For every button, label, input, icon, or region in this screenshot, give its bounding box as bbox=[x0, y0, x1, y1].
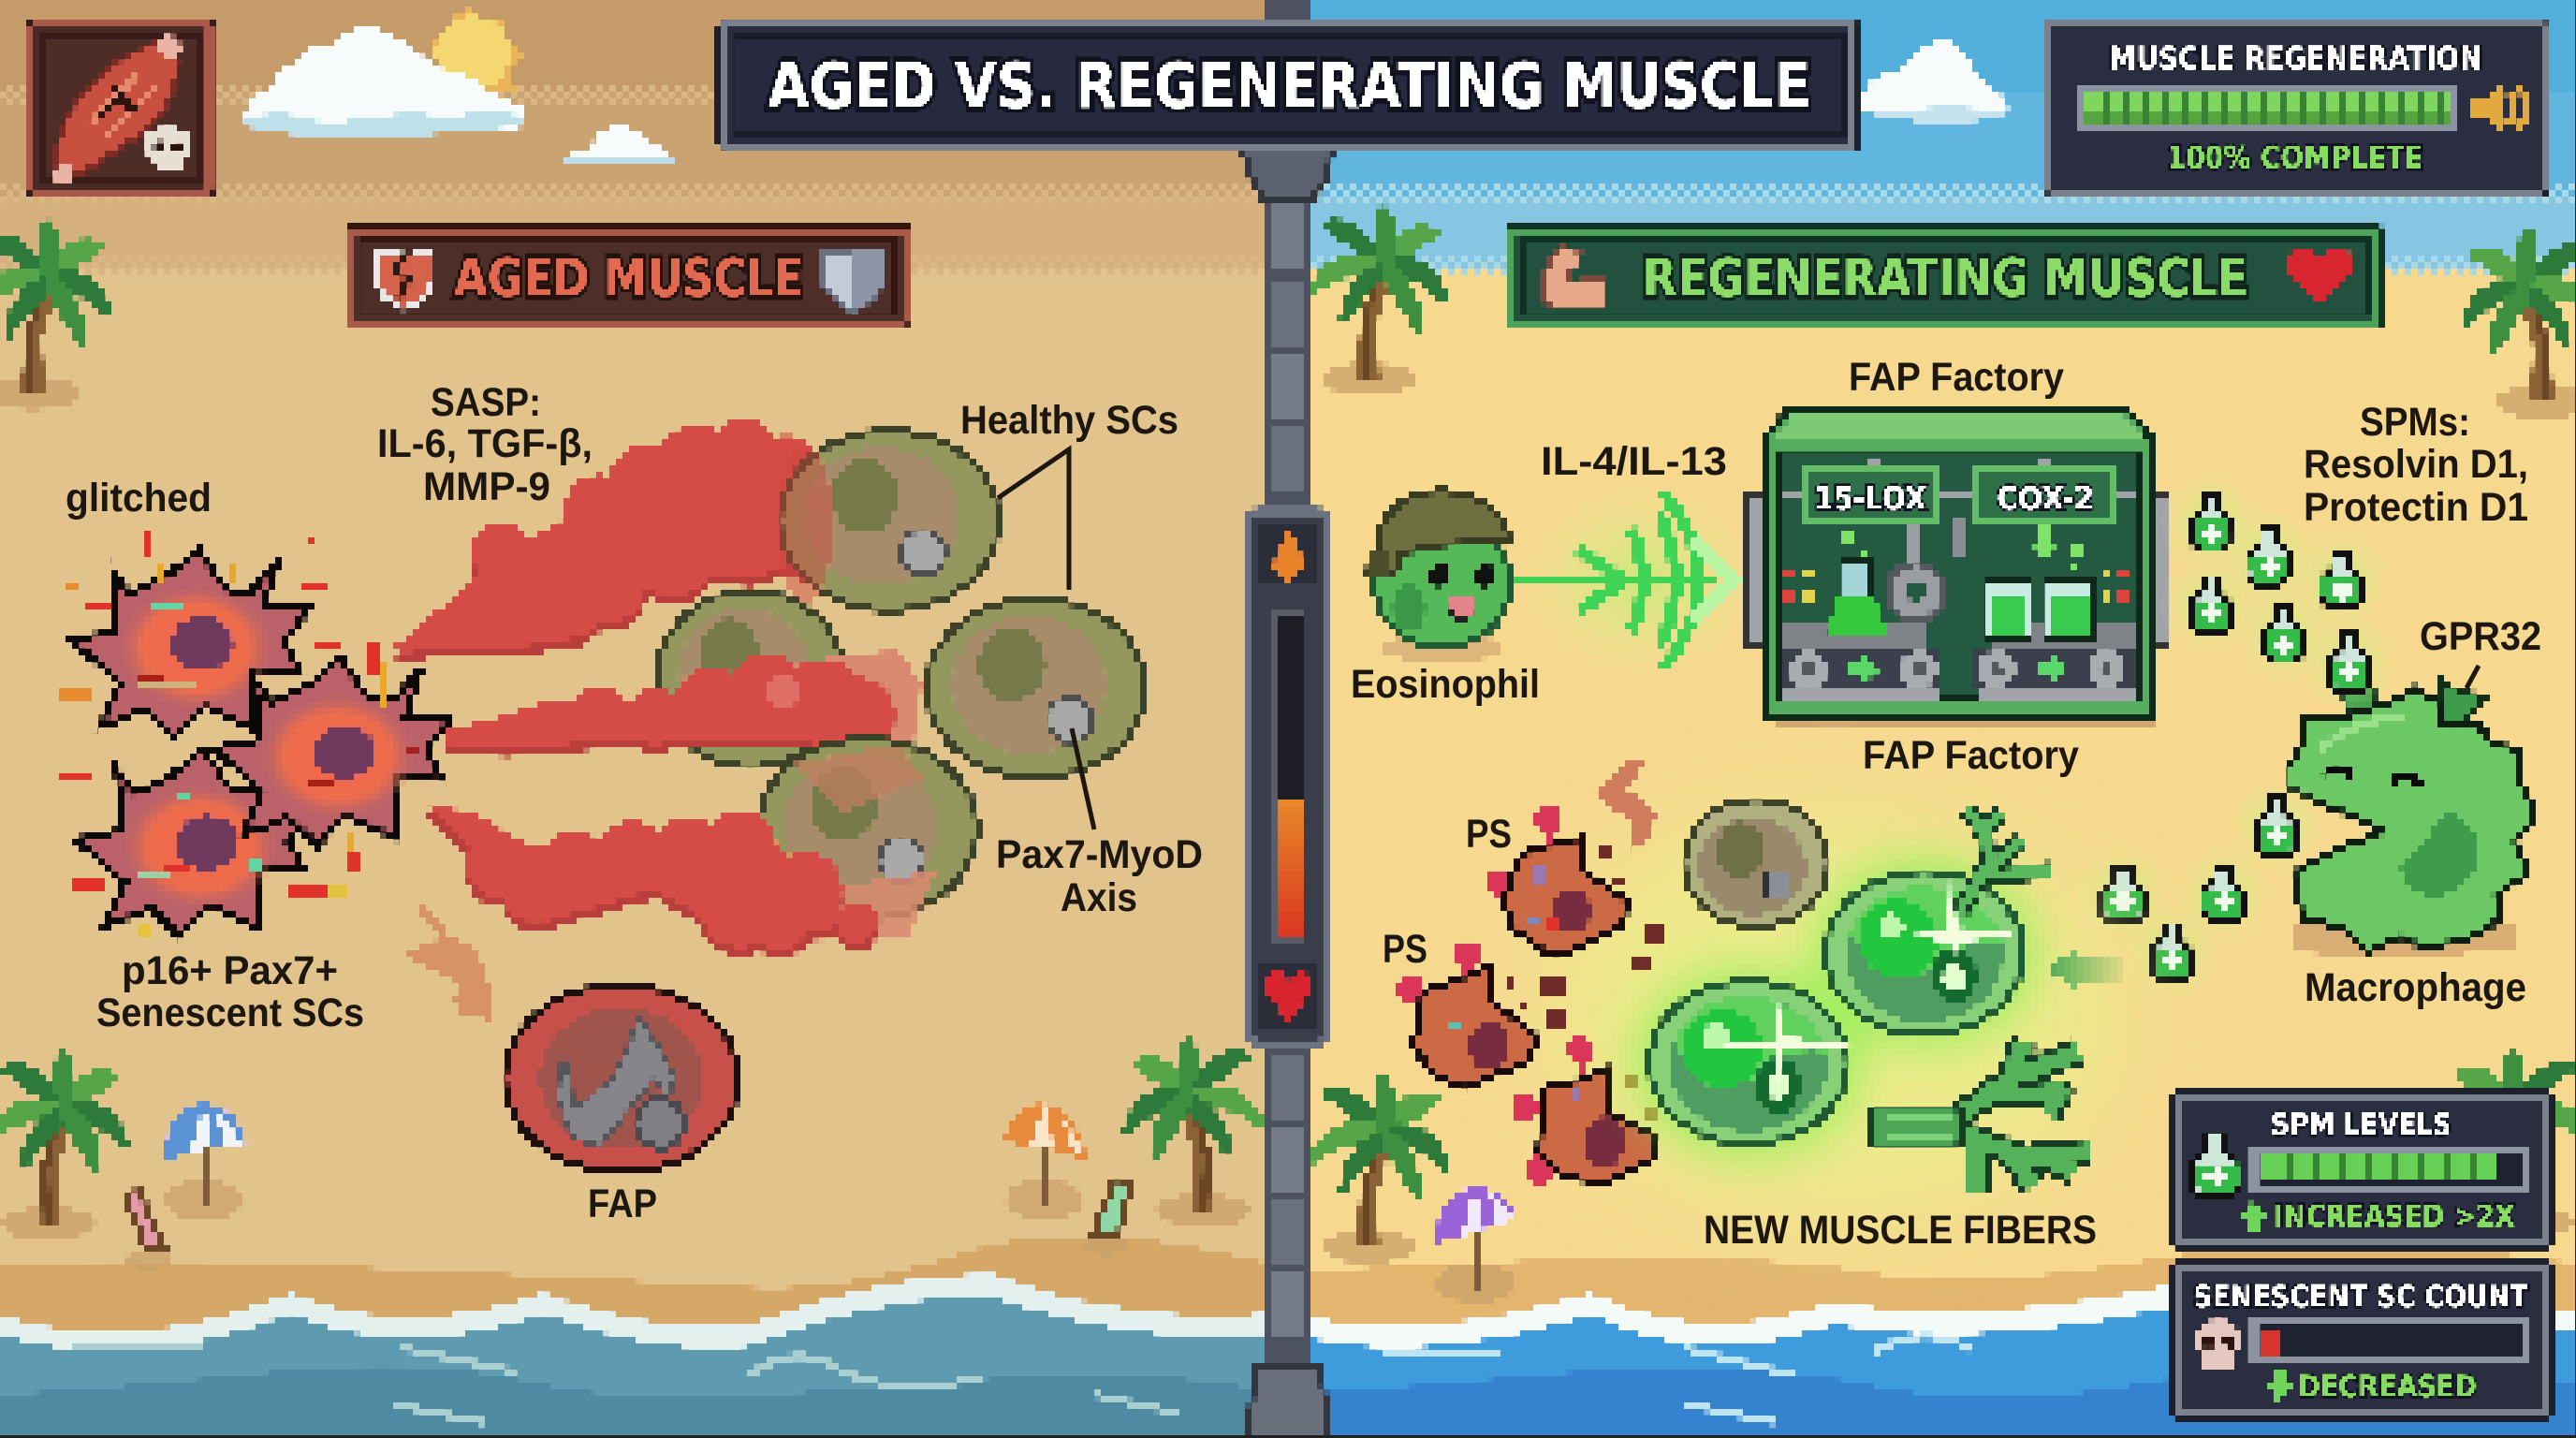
label: SPMs bbox=[2304, 400, 2528, 530]
label box: COX-2 bbox=[1977, 471, 2113, 521]
regenerating cell upper bbox=[1825, 808, 2052, 1034]
label: Pax7-MyoD Axis: Axis bbox=[1061, 875, 1137, 920]
icon: beakers bbox=[1984, 580, 2031, 638]
icon: up arrow bbox=[2239, 1200, 2267, 1232]
label: senescent SCs bbox=[96, 948, 364, 1035]
healthy satellite cell right bbox=[927, 598, 1146, 778]
label: SASP: MMP-9 bbox=[423, 464, 550, 509]
senescent cell top bbox=[71, 550, 309, 737]
factory enzyme labels: COX-2 bbox=[1997, 480, 2094, 518]
icon: flask bbox=[1827, 562, 1887, 633]
label: SASP: IL-6, TGF-β, bbox=[377, 421, 593, 466]
umbrella: blue bbox=[162, 1103, 246, 1221]
HUD text: SPM: SPM LEVELS bbox=[2271, 1107, 2452, 1142]
icon: eosinophil bbox=[1367, 491, 1511, 663]
arrow: IL-4/IL-13 signal bbox=[1521, 487, 1755, 674]
deck chair: green bbox=[1082, 1180, 1132, 1255]
panel: SPM levels bbox=[2171, 1090, 2553, 1251]
label: Eosinophil: Eosinophil bbox=[1351, 662, 1540, 707]
factory enzyme labels: 15-LOX bbox=[1814, 480, 1926, 518]
label: Healthy SCs: Healthy SCs bbox=[960, 398, 1178, 443]
factory enzyme labels bbox=[1814, 480, 2094, 518]
cloud: large bbox=[245, 27, 527, 139]
icon: broken shield bbox=[376, 251, 432, 309]
healthy satellite cell top bbox=[780, 431, 999, 610]
smoke plume: top bbox=[395, 418, 847, 665]
title: AGED VS. REGENERATING MUSCLE bbox=[768, 50, 1811, 124]
heading: aged muscle: AGED MUSCLE bbox=[454, 248, 803, 309]
umbrella: orange bbox=[1003, 1103, 1087, 1221]
smoke wisp bbox=[402, 903, 491, 1020]
palm tree: top left bbox=[0, 223, 110, 410]
label: FAP Factory top: FAP Factory bbox=[1849, 355, 2064, 400]
label: Pax7-MyoD Axis: Pax7-MyoD bbox=[996, 832, 1203, 877]
glitch sparks bbox=[61, 532, 417, 934]
icon: speaker bbox=[2471, 84, 2501, 131]
label: GPR32: GPR32 bbox=[2420, 614, 2541, 659]
connector lines bbox=[998, 449, 2479, 829]
label: new muscle fibers: NEW MUSCLE FIBERS bbox=[1704, 1208, 2097, 1253]
icon: muscle bbox=[56, 39, 178, 180]
smoke overlay on top cell bbox=[777, 445, 833, 604]
palm tree: lower left bbox=[0, 1053, 125, 1240]
panel: senescent SC count bbox=[2171, 1261, 2553, 1421]
heading: regenerating muscle: REGENERATING MUSCLE bbox=[1643, 248, 2248, 309]
new muscle fiber bbox=[1868, 1041, 2088, 1192]
icon: heart bbox=[1263, 972, 1313, 1020]
SPM bottles bbox=[2074, 474, 2398, 1001]
macrophage bbox=[2287, 679, 2534, 958]
deck chair: pink bbox=[124, 1192, 172, 1269]
icon: flexed arm bbox=[1543, 248, 1604, 307]
icon: skull bbox=[2195, 1320, 2241, 1369]
senescent cell middle bbox=[213, 658, 451, 845]
FAP factory bbox=[1747, 409, 2170, 728]
palm tree: behind SPM panel bbox=[2451, 1051, 2576, 1239]
HUD text: SPM: INCREASED >2X bbox=[2274, 1198, 2515, 1234]
label: senescent SCs: p16+ Pax7+ bbox=[122, 948, 338, 993]
label: SASP bbox=[377, 380, 593, 509]
label: SPMs: Protectin D1 bbox=[2304, 485, 2528, 530]
debris bbox=[1505, 843, 1664, 1123]
cloud: small bbox=[566, 125, 672, 167]
label box: 15-LOX bbox=[1804, 471, 1938, 521]
healthy satellite cell middle bbox=[656, 591, 845, 767]
label: SPMs: SPMs: bbox=[2360, 400, 2470, 445]
label: Macrophage: Macrophage bbox=[2305, 965, 2526, 1010]
HUD text: progress: MUSCLE REGENERATION bbox=[2109, 40, 2482, 78]
green glow behind cells bbox=[1554, 819, 2115, 1212]
healthy satellite cell lower bbox=[758, 739, 977, 918]
palm tree: regen right bbox=[2466, 232, 2576, 419]
label: Pax7-MyoD Axis bbox=[996, 832, 1203, 920]
banner: regenerating muscle bbox=[1505, 224, 2384, 330]
panel: regenerating beach sky bbox=[1288, 0, 2576, 1311]
apoptotic cell 2 bbox=[1397, 941, 1537, 1088]
smoke plume: middle bbox=[440, 651, 922, 758]
dull satellite cell bbox=[1684, 800, 1828, 927]
label: PS lower: PS bbox=[1383, 927, 1427, 972]
label: glitched: glitched bbox=[66, 476, 212, 521]
HUD text: senescent: SENESCENT SC COUNT bbox=[2193, 1279, 2528, 1314]
HUD text: senescent: DECREASED bbox=[2298, 1369, 2477, 1404]
gauge on divider bbox=[1250, 511, 1326, 1043]
HUD text: senescent bbox=[2193, 1279, 2528, 1404]
palm tree: regen lower left bbox=[1310, 1077, 1445, 1264]
cloud: right bbox=[1858, 41, 2009, 124]
umbrella: purple bbox=[1433, 1185, 1517, 1303]
icon: silver shield bbox=[824, 251, 883, 311]
label: SPMs: Resolvin D1, bbox=[2304, 442, 2528, 487]
panel: muscle regeneration progress bbox=[2042, 18, 2551, 198]
icon: sun bbox=[431, 7, 526, 106]
conveyor right bbox=[1989, 623, 2134, 646]
label: FAP Factory bottom: FAP Factory bbox=[1863, 733, 2079, 778]
icon: flame bbox=[1273, 532, 1302, 580]
icon: skull bbox=[145, 127, 191, 172]
icon: down arrow bbox=[2264, 1369, 2292, 1401]
icon: gear bbox=[1888, 564, 1944, 620]
apoptotic cell 3 bbox=[1511, 1036, 1658, 1186]
new branch bbox=[1958, 808, 2052, 915]
banner: aged muscle bbox=[344, 224, 912, 330]
green glow behind cells bbox=[1632, 856, 2039, 1160]
water: aged side bbox=[0, 1236, 1288, 1438]
regenerating cell lower bbox=[1649, 932, 1852, 1144]
palm tree: lower right of aged side bbox=[1126, 1040, 1261, 1227]
label: FAP: FAP bbox=[588, 1181, 657, 1226]
title panel bbox=[717, 19, 1859, 152]
water: regenerating side bbox=[1288, 1244, 2576, 1438]
label: SASP: SASP: bbox=[431, 380, 541, 425]
label: IL-4/IL-13: IL-4/IL-13 bbox=[1541, 439, 1727, 484]
icon: heart bbox=[2286, 248, 2354, 307]
FAP cell aged bbox=[505, 985, 739, 1172]
label: senescent SCs: Senescent SCs bbox=[96, 990, 364, 1035]
senescent cell bottom bbox=[76, 749, 314, 936]
smoke wisp: regen bbox=[1595, 758, 1658, 852]
icon panel: damaged muscle bbox=[25, 18, 216, 198]
conveyor left bbox=[1783, 623, 1928, 646]
HUD text: progress: 100% COMPLETE bbox=[2167, 139, 2423, 177]
apoptotic cell 1 bbox=[1486, 805, 1628, 958]
smoke plume: lower bbox=[423, 744, 936, 958]
icon: SPM bottle bbox=[2192, 1133, 2241, 1198]
HUD text: progress bbox=[2109, 40, 2482, 177]
center divider pillar bbox=[1243, 0, 1333, 1438]
HUD text: SPM bbox=[2271, 1107, 2515, 1234]
arrow: toward cells bbox=[2047, 946, 2124, 992]
panel: aged beach sky bbox=[0, 0, 1288, 1311]
palm tree: regen left bbox=[1310, 209, 1445, 396]
label: PS upper: PS bbox=[1466, 812, 1512, 857]
